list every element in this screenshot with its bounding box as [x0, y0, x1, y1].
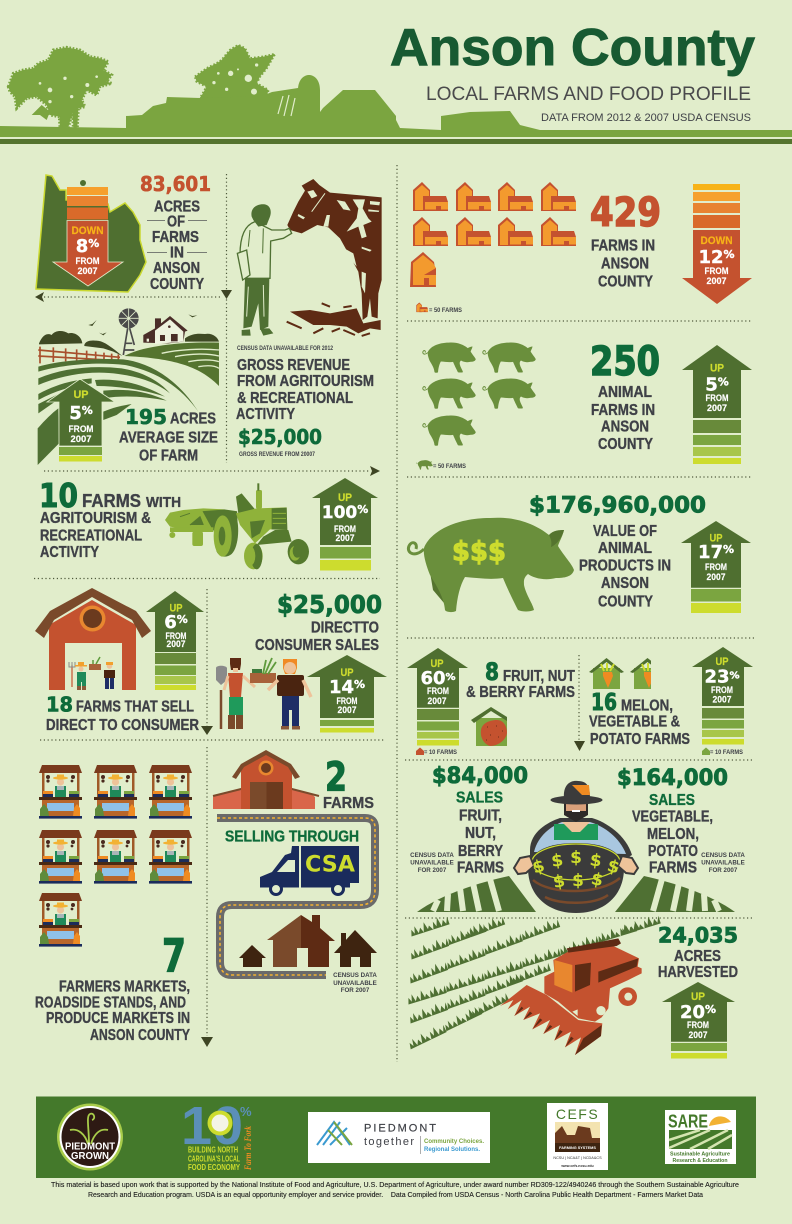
note: census unavailable: FOR 2007: [341, 987, 370, 994]
arrow: up 14% from 2007: 2007: [338, 705, 356, 715]
panel: $25,000 direct to consumer sales: CONSUMER SALES: [255, 637, 379, 654]
data source line: DATA FROM 2012 & 2007 USDA CENSUS: [541, 112, 751, 124]
icon: pig with dollars: $$$: [452, 537, 506, 568]
logo: Piedmont Grown: PIEDMONT: [65, 1142, 115, 1152]
arrow: up 5% from 2007: %: [82, 404, 93, 417]
panel: value of animal products: $176,960,000: [529, 494, 706, 519]
panel: value of animal products: COUNTY: [598, 594, 653, 611]
panel: 18 farms direct to consumer: DIRECT TO CONSUMER: [46, 717, 199, 734]
arrow: up 14% from 2007: %: [354, 678, 365, 691]
logo: SARE: Sustainable Agriculture: [670, 1152, 731, 1158]
icon row: farm buildings: [410, 182, 576, 287]
logo: SARE: [665, 1110, 736, 1164]
note: census unavailable right: UNAVAILABLE: [701, 860, 745, 866]
arrow: up 23% from 2007: %: [730, 671, 740, 682]
panel: 250 animal farms: ANIMAL: [598, 384, 652, 401]
tree middle: [195, 45, 275, 98]
panel: gross revenue from agritourism: CENSUS DATA UNAVAILABLE FOR 2012: [237, 345, 333, 352]
panel: 10 farms with agritourism: FARMS: [82, 491, 141, 511]
icon: strawberry house: [471, 707, 507, 746]
road: [217, 818, 375, 975]
ground, barns and silo silhouette: [0, 75, 792, 137]
arrow: down 12% from 2007: 2007: [706, 276, 726, 286]
panel: 429 farms: 429: [590, 190, 661, 236]
arrow: up 17% from 2007: UP: [710, 533, 722, 545]
panel: value of animal products: ANIMAL: [598, 540, 652, 557]
fruit sales text: BERRY: [458, 843, 503, 860]
vegetable sales text: MELON,: [647, 826, 699, 843]
arrow: up 60% from 2007: %: [446, 672, 456, 683]
arrow: up 60% from 2007: FROM: [427, 686, 449, 696]
panel: 16 melon, vegetable and potato farms: [589, 647, 753, 756]
panel: 10 farms with agritourism: [39, 476, 181, 561]
icon: carrot houses: [589, 658, 665, 689]
legend: 10 farms: = 10 FARMS: [424, 749, 457, 756]
panel: 250 animal farms: [416, 339, 752, 470]
logo: 10 percent campaign: %: [240, 1104, 252, 1119]
logo: 10 percent campaign: BUILDING NORTH: [188, 1144, 238, 1154]
arrow: down 8% from 2007: 8: [76, 236, 88, 257]
panel: 7 farmers markets: FARMERS MARKETS,: [59, 979, 190, 996]
windmill: [119, 308, 139, 355]
fruit sales text: SALES: [456, 790, 503, 807]
arrow: down 8% from 2007: 2007: [78, 266, 98, 276]
funding acknowledgement: This material is based upon work that is supported by the National Institute of Food and Agriculture, U.S. Department of Agriculture, under award number RD309-122/4940246 through the Southern Sustainable Agriculture: [51, 1180, 739, 1189]
panel: 8 fruit, nut and berry farms: FRUIT, NUT: [503, 668, 575, 685]
arrow: up 14% from 2007: UP: [340, 667, 354, 679]
panel: 429 farms: FARMS IN: [591, 238, 655, 255]
panel: 18 farms direct to consumer: [35, 588, 204, 734]
note: census unavailable left: CENSUS DATA: [410, 852, 454, 859]
panel: 2 farms selling through CSA: FARMS: [323, 795, 374, 812]
panel: 250 animal farms: COUNTY: [598, 436, 653, 453]
arrow: down 8% from 2007: [53, 187, 123, 286]
farmhouse: [143, 316, 188, 344]
note: census unavailable left: FOR 2007: [418, 867, 447, 874]
logo: CEFS: [547, 1103, 608, 1170]
legend: 50 farms: = 50 FARMS: [433, 463, 466, 470]
icon: farmer holding bowl of dollars: $: [588, 850, 603, 872]
arrow: up 20% from 2007: [662, 982, 735, 1058]
panel: gross revenue from agritourism: GROSS REVENUE: [237, 357, 350, 374]
panel: 195 acres average: 195: [125, 405, 167, 429]
arrow: up 6% from 2007: 6: [164, 612, 177, 633]
arrow: up 17% from 2007: [681, 521, 751, 613]
logo: 10 percent campaign: FOOD ECONOMY: [188, 1162, 240, 1172]
field left stripes: [38, 359, 198, 465]
title: Anson County: [390, 19, 755, 77]
arrow: up 14% from 2007: [307, 655, 387, 732]
arrow: up 6% from 2007: UP: [170, 603, 182, 615]
county map: [36, 175, 146, 292]
arrow: down 12% from 2007: [682, 184, 752, 304]
arrow: up 100% from 2007: 2007: [336, 533, 354, 543]
vegetable sales text: [617, 766, 728, 877]
panel: gross revenue from agritourism: [236, 345, 374, 458]
icon: barn: [213, 750, 319, 809]
bush streaks: [278, 95, 295, 116]
panel: 7 farmers markets: [35, 765, 192, 1044]
panel: value of animal products: VALUE OF: [593, 523, 657, 540]
panel: 7 farmers markets: ANSON COUNTY: [90, 1027, 190, 1044]
panel: 195 acres average: ACRES: [170, 410, 216, 428]
logo: Piedmont Grown: GROWN: [71, 1151, 109, 1162]
legend: 10 farms: [416, 748, 457, 756]
arrow: up 6% from 2007: 2007: [166, 639, 186, 649]
arrow: up 5% from 2007: UP: [74, 389, 88, 401]
panel: value of animal products: PRODUCTS IN: [579, 558, 671, 575]
legend: 50 farms: [416, 460, 466, 470]
fruit sales text: NUT,: [465, 825, 496, 842]
boy: [237, 204, 292, 336]
icon: farmer holding bowl of dollars: $: [589, 869, 605, 891]
acres of farms label: IN: [170, 244, 184, 262]
arrow: up 5% from 2007: FROM: [706, 393, 728, 403]
panel: 195 acres average: [47, 379, 218, 465]
fruit sales text: [432, 764, 528, 877]
logo: CEFS: FARMING SYSTEMS: [559, 1146, 596, 1150]
fruit sales text: FRUIT,: [459, 808, 502, 825]
icon: farmer holding bowl of dollars: $: [570, 848, 582, 868]
arrow: up 5% from 2007: UP: [710, 363, 724, 375]
panel: 429 farms: COUNTY: [598, 274, 653, 291]
logo: 10 percent campaign: 10: [181, 1096, 243, 1156]
icon: farmer holding bowl of dollars: $: [550, 850, 565, 872]
logo: CEFS: CEFS: [556, 1106, 599, 1122]
arrow: up 17% from 2007: FROM: [705, 562, 727, 572]
icon: farmer holding bowl of dollars: $: [572, 871, 584, 891]
arrow: up 20% from 2007: 2007: [688, 1030, 708, 1040]
arrow: up 100% from 2007: %: [357, 503, 368, 516]
logo: CEFS: NCSU | NCA&T | NCDA&CS: [553, 1156, 602, 1160]
icon: tractor: [165, 483, 309, 569]
panel: 7 farmers markets: ROADSIDE STANDS, AND: [35, 995, 186, 1012]
arrow: up 5% from 2007: 2007: [70, 434, 92, 444]
vegetable sales text: $164,000: [617, 766, 728, 791]
fruit sales text: $84,000: [432, 764, 528, 789]
note: census unavailable right: [701, 852, 745, 874]
panel: 24,035 acres harvested: HARVESTED: [658, 964, 738, 981]
logo: CEFS: www.cefs.ncsu.edu: [560, 1164, 594, 1168]
birds: [88, 314, 197, 335]
panel: 24,035 acres harvested: 24,035: [658, 924, 738, 948]
illustration: boy and cow: [237, 179, 382, 336]
arrow: up 17% from 2007: 2007: [706, 572, 726, 582]
icon: harvester: [500, 938, 642, 1055]
people with produce crate: [216, 658, 311, 730]
panel: 10 farms with agritourism: ACTIVITY: [40, 544, 99, 561]
arrow: down 12% from 2007: FROM: [704, 266, 728, 276]
panel: 195 acres average: OF FARM: [139, 448, 198, 465]
note: census unavailable left: UNAVAILABLE: [410, 860, 454, 866]
arrow: down 12% from 2007: DOWN: [700, 235, 733, 247]
field left: [417, 876, 536, 912]
field right: [124, 342, 219, 386]
arrow: up 5% from 2007: 2007: [707, 403, 727, 413]
logo: Piedmont Together: PIEDMONT: [364, 1123, 436, 1135]
arrow: up 5% from 2007: FROM: [68, 424, 94, 434]
arrow: down 12% from 2007: %: [724, 248, 735, 261]
acres of farms label: OF: [167, 214, 185, 230]
panel: 10 farms with agritourism: WITH: [146, 494, 181, 511]
icon: farmer holding bowl of dollars: $: [605, 856, 622, 878]
panel: gross revenue from agritourism: ACTIVITY: [236, 406, 295, 423]
panel: 83,601 acres of farms: [36, 172, 211, 293]
arrow: up 14% from 2007: 14: [329, 677, 354, 698]
panel: 24,035 acres harvested: ACRES: [674, 948, 721, 965]
panel: 10 farms with agritourism: 10: [39, 476, 78, 515]
arrow: up 6% from 2007: FROM: [166, 631, 186, 641]
arrow: up 23% from 2007: UP: [716, 656, 728, 668]
tree lines: [39, 331, 219, 356]
panel: 7 farmers markets: 7: [162, 930, 186, 983]
panel: gross revenue from agritourism: FROM AGRITOURISM: [237, 373, 374, 390]
acres of farms label: FARMS: [152, 229, 199, 246]
arrow: up 5% from 2007: %: [718, 376, 729, 389]
subtitle: LOCAL FARMS AND FOOD PROFILE: [426, 84, 751, 105]
legend: 10 farms: [702, 748, 743, 756]
arrow: up 100% from 2007: FROM: [334, 524, 356, 534]
logo: Piedmont Together: [308, 1112, 490, 1163]
note: census unavailable right: FOR 2007: [709, 867, 738, 874]
farmer couple in doorway: [69, 657, 115, 690]
panel: 16 melon, vegetable and potato farms: POTATO FARMS: [590, 731, 690, 748]
acres of farms label: ANSON: [153, 260, 200, 277]
logo: 10 percent campaign: Farm To Fork: [243, 1126, 253, 1171]
fruit sales text: FARMS: [457, 860, 504, 877]
arrow: down 8% from 2007: %: [88, 237, 99, 250]
arrow: up 5% from 2007: [682, 345, 752, 464]
panel: value of animal products: [408, 494, 751, 613]
panel: 18 farms direct to consumer: 18: [46, 693, 73, 717]
arrow: up 60% from 2007: UP: [430, 658, 444, 670]
panel: 7 farmers markets: PRODUCE MARKETS IN: [46, 1010, 190, 1027]
arrow: up 5% from 2007: [47, 379, 115, 462]
fence: [38, 347, 120, 363]
tree left: [8, 47, 112, 127]
panel: 2 farms selling through CSA: SELLING THROUGH: [225, 829, 359, 846]
panel: 24,035 acres harvested: [406, 914, 738, 1058]
panel: 18 farms direct to consumer: FARMS THAT SELL: [76, 699, 194, 716]
logo: 10 percent campaign: [181, 1096, 253, 1172]
footer logo band: [36, 1096, 756, 1178]
acres of farms label: COUNTY: [150, 276, 204, 293]
arrow: up 23% from 2007: [692, 647, 753, 744]
note: census unavailable left: [410, 852, 454, 874]
arrow: up 100% from 2007: [312, 478, 378, 570]
note: census unavailable: [333, 972, 377, 994]
legend: 10 farms: = 10 FARMS: [710, 749, 743, 756]
arrow: up 17% from 2007: 17: [698, 542, 723, 563]
logo: Piedmont Grown: [57, 1104, 123, 1170]
panel: 250 animal farms: 250: [590, 339, 660, 385]
panel: 2 farms selling through CSA: 2: [325, 755, 347, 801]
panel: 16 melon, vegetable and potato farms: MELON,: [621, 698, 673, 714]
vegetable sales text: SALES: [649, 792, 695, 809]
panel: 2 farms selling through CSA: [213, 750, 377, 994]
arrow: up 6% from 2007: %: [177, 613, 188, 626]
panel: value of animal products: ANSON: [601, 575, 649, 592]
icon: farmer holding bowl of dollars: [514, 781, 638, 913]
crop rows: [406, 914, 661, 1050]
panel: $25,000 direct to consumer sales: DIRECTTO: [311, 620, 379, 637]
arrow: up 5% from 2007: 5: [705, 375, 718, 396]
note: census unavailable: CENSUS DATA: [333, 972, 377, 979]
panel: 250 animal farms: FARMS IN: [591, 402, 655, 419]
dotted flow lines: [34, 165, 756, 1062]
arrow: up 100% from 2007: UP: [338, 492, 352, 504]
illustration: farm scene: [38, 308, 219, 465]
market stands: [39, 765, 192, 947]
vegetable sales text: POTATO: [648, 843, 698, 860]
panel: 16 melon, vegetable and potato farms: VEGETABLE &: [589, 714, 680, 731]
arrow: up 17% from 2007: %: [723, 543, 734, 556]
arrow: up 20% from 2007: %: [705, 1003, 716, 1016]
vegetable sales text: FARMS: [649, 860, 697, 877]
panel: 195 acres average: AVERAGE SIZE: [119, 430, 218, 447]
panel: 16 melon, vegetable and potato farms: 16: [591, 690, 617, 716]
icon: CSA truck: CSA: [305, 853, 355, 878]
number 83,601: 83,601: [140, 172, 211, 196]
panel: 429 farms: ANSON: [601, 256, 649, 273]
panel: 429 farms: [410, 182, 752, 314]
arrow: down 8% from 2007: DOWN: [72, 225, 104, 237]
map bump: [80, 180, 86, 186]
icon: farmer holding bowl of dollars: $: [530, 856, 547, 878]
panel: 8 fruit, nut and berry farms: & BERRY FARMS: [466, 684, 575, 701]
arrow: up 23% from 2007: 23: [704, 667, 730, 688]
arrow: up 23% from 2007: FROM: [711, 685, 733, 695]
arrow: up 20% from 2007: FROM: [687, 1020, 709, 1030]
panel: 8 fruit, nut and berry farms: [407, 648, 575, 756]
arrow: up 60% from 2007: 2007: [428, 696, 446, 706]
vegetable sales text: VEGETABLE,: [632, 809, 713, 826]
icon: pig with dollars: [408, 518, 574, 612]
arrow: up 23% from 2007: 2007: [712, 695, 732, 705]
icon: farmer holding bowl of dollars: $: [552, 871, 567, 893]
arrow: up 6% from 2007: [146, 591, 204, 690]
arrow: up 100% from 2007: 100: [322, 503, 357, 523]
header landscape: [0, 45, 792, 144]
panel: 10 farms with agritourism: RECREATIONAL: [40, 528, 142, 545]
panel: gross revenue from agritourism: $25,000: [238, 425, 322, 449]
funding acknowledgement: Research and Education program. USDA is an equal opportunity employer and service provider. Data Compiled from USDA Census - North Carolina Public Health Department - Farmers Market Data: [88, 1190, 704, 1199]
logo: 10 percent campaign: CAROLINA'S LOCAL: [188, 1154, 240, 1164]
logo: Piedmont Together: Community Choices.: [424, 1138, 484, 1145]
acres of farms label: [147, 198, 207, 293]
panel: $25,000 direct to consumer sales: $25,000: [277, 590, 382, 619]
icon row: pigs: [423, 343, 536, 446]
panel: fruit sales and vegetable sales: [410, 764, 745, 913]
note: census unavailable: UNAVAILABLE: [333, 980, 377, 987]
icon: red barn with farmers: [35, 588, 151, 690]
arrow: down 12% from 2007: 12: [698, 247, 724, 268]
funding acknowledgement: [51, 1180, 739, 1199]
panel: 8 fruit, nut and berry farms: 8: [485, 658, 499, 686]
legend: 50 farms: = 50 FARMS: [429, 307, 462, 314]
arrow: up 5% from 2007: 5: [69, 403, 82, 424]
legend: 50 farms: [416, 302, 462, 314]
acres of farms label: ACRES: [154, 198, 200, 216]
arrow: up 60% from 2007: 60: [420, 668, 446, 689]
logo: Piedmont Together: together: [364, 1136, 414, 1148]
cow: [287, 179, 382, 336]
panel: gross revenue from agritourism: GROSS REVENUE FROM 20007: [239, 451, 315, 458]
panel: 10 farms with agritourism: AGRITOURISM &: [40, 510, 151, 527]
panel: 250 animal farms: ANSON: [601, 419, 649, 436]
icon: houses: [239, 915, 377, 967]
logo: SARE: Research & Education: [672, 1158, 728, 1164]
header band: [0, 139, 792, 144]
arrow: up 60% from 2007: [407, 648, 468, 746]
field right: [615, 876, 735, 912]
arrow: down 8% from 2007: FROM: [76, 256, 100, 266]
panel: $25,000 direct to consumer sales: [216, 590, 387, 732]
arrow: up 20% from 2007: 20: [680, 1002, 705, 1023]
arrow: up 20% from 2007: UP: [691, 991, 705, 1003]
note: census unavailable right: CENSUS DATA: [701, 852, 745, 859]
icon: CSA truck: [260, 846, 359, 894]
panel: gross revenue from agritourism: & RECREATIONAL: [237, 390, 353, 407]
arrow: up 14% from 2007: FROM: [336, 696, 358, 706]
logo: SARE: SARE: [668, 1112, 708, 1132]
logo: Piedmont Together: Regional Solutions.: [424, 1146, 480, 1153]
